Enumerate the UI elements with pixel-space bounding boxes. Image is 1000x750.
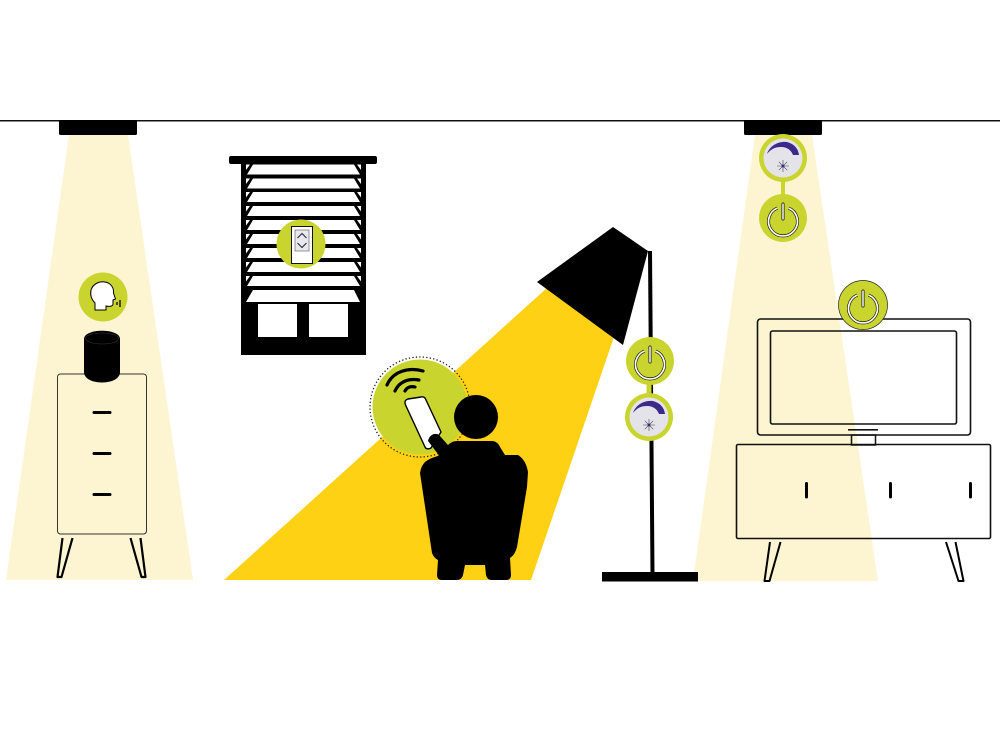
TV neck [852, 435, 876, 445]
floor lamp [537, 227, 698, 582]
icon: ceiling dimmer [759, 134, 807, 182]
connector between lamp controls [646, 383, 652, 396]
armchair and body silhouette [420, 441, 528, 580]
window with motorized blinds [229, 156, 377, 355]
left light beam [6, 135, 193, 580]
window frame [241, 163, 366, 355]
floor lamp light beam [224, 287, 616, 580]
icon: voice control [78, 272, 128, 322]
console handles [806, 484, 970, 497]
blind slats [246, 164, 360, 302]
icon: lamp dimmer [625, 393, 673, 441]
icon: ceiling power button [759, 194, 807, 242]
TV screen outer [758, 319, 970, 435]
blind edge triangles [246, 164, 361, 282]
right ceiling light fixture [744, 120, 822, 135]
icon: blind control switch [276, 220, 326, 268]
TV screen inner [770, 331, 956, 424]
remote control [405, 397, 441, 449]
person in armchair with remote [370, 357, 528, 580]
curtain rod [229, 156, 377, 164]
console legs [764, 542, 964, 581]
remote control callout circle [372, 360, 468, 454]
lamp base [602, 572, 698, 582]
lamp pole [648, 251, 654, 575]
cabinet body [58, 374, 146, 534]
left ceiling light fixture [59, 120, 137, 135]
smart speaker [84, 331, 120, 382]
window panes [258, 304, 348, 337]
TV logo bar [848, 429, 878, 431]
person's head [454, 395, 498, 439]
cabinet with speaker and voice control [58, 272, 146, 577]
icon: wifi signal [387, 370, 423, 391]
person's arm [428, 434, 448, 458]
dotted callout outline [370, 357, 470, 457]
cabinet legs [58, 538, 146, 577]
connector between ceiling controls [781, 180, 785, 197]
right light beam [693, 135, 878, 581]
console body [736, 444, 990, 538]
TV and console [736, 280, 990, 581]
icon: lamp power button [626, 337, 674, 385]
ceiling light controls [759, 134, 807, 242]
icon: TV power button [838, 280, 888, 330]
lamp shade [537, 227, 648, 345]
cabinet handles [94, 412, 110, 494]
ceiling line [0, 120, 1000, 122]
